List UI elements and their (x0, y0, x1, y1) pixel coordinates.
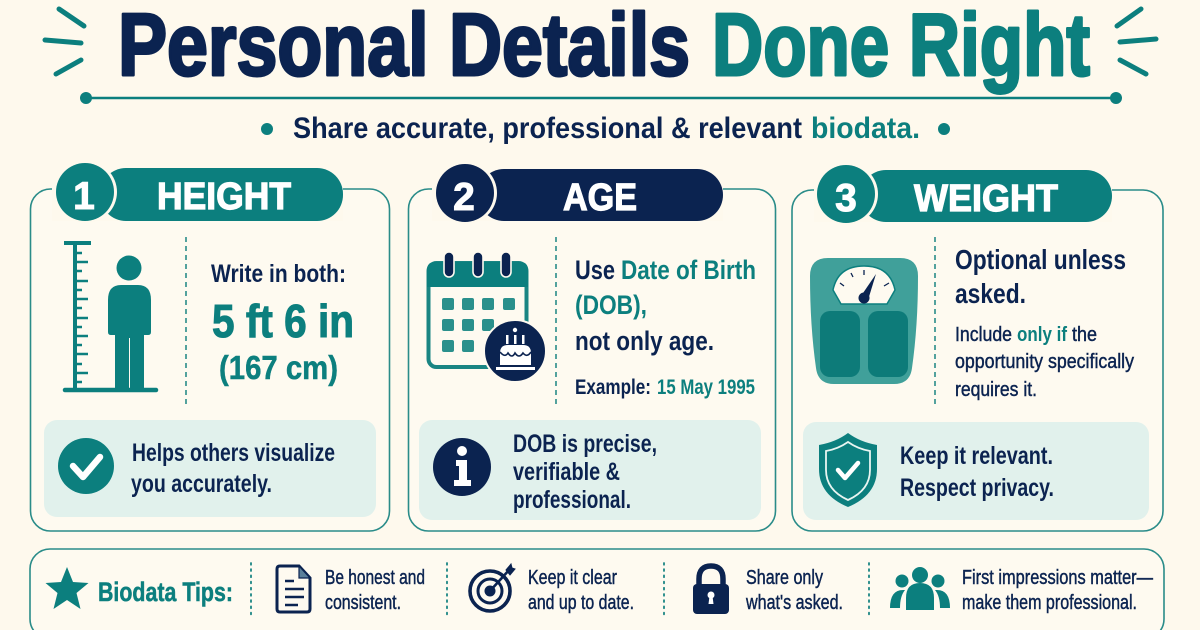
icon: ruler and person (64, 243, 156, 390)
subtitle: biodata. (811, 112, 920, 145)
age guidance text (575, 255, 756, 399)
weight header (814, 163, 1112, 225)
age guidance text: 15 May 1995 (657, 376, 755, 399)
tip: honest (277, 566, 425, 614)
weight callout (803, 422, 1149, 520)
weight header: WEIGHT (914, 178, 1058, 220)
height guidance text: (167 cm) (219, 349, 338, 386)
panel: height (30, 161, 390, 531)
weight guidance text: Optional unless (955, 244, 1126, 275)
icon: check (58, 438, 114, 494)
weight header: 3 (835, 177, 857, 220)
height header: HEIGHT (157, 176, 291, 218)
age callout: verifiable & (513, 458, 620, 486)
age callout: DOB is precise, (513, 430, 657, 458)
weight guidance text: only if (1017, 324, 1067, 346)
tip: first impressions: make them professional. (962, 592, 1137, 614)
icon: lock (693, 566, 729, 614)
tip: clear (470, 564, 634, 614)
height callout: Helps others visualize (132, 439, 335, 467)
left spark accents (45, 9, 84, 74)
icon: calendar with cake (427, 252, 546, 382)
tip: clear: Keep it clear (528, 567, 617, 589)
age header: 2 (453, 176, 475, 219)
age header: AGE (563, 177, 637, 219)
tip: share only: what's asked. (745, 592, 843, 614)
tip: first impressions (890, 567, 1153, 614)
age callout (419, 420, 761, 520)
title underline (80, 92, 1122, 104)
height callout (44, 420, 376, 517)
age callout: professional. (513, 486, 631, 514)
tip: share only (693, 566, 843, 614)
icon: star (46, 567, 88, 609)
weight guidance text: opportunity specifically (955, 351, 1134, 373)
age guidance text: not only age. (575, 326, 714, 356)
weight guidance text: requires it. (955, 379, 1037, 401)
icon: target (470, 564, 515, 611)
height header: 1 (73, 175, 95, 218)
panel: biodata tips (30, 549, 1164, 630)
age guidance text: (DOB), (575, 290, 647, 320)
icon: bathroom scale (810, 258, 918, 384)
panel: age (408, 162, 776, 531)
weight guidance text: asked. (955, 278, 1026, 309)
weight guidance text: the (1072, 324, 1097, 346)
age guidance text: Example: (575, 376, 651, 399)
height callout: you accurately. (131, 470, 272, 498)
icon: people (890, 567, 950, 610)
weight guidance text (955, 244, 1134, 401)
tip: share only: Share only (746, 567, 823, 589)
panel: weight (792, 163, 1163, 531)
right spark accents (1117, 9, 1156, 74)
tips heading: Biodata Tips: (98, 577, 233, 607)
height guidance text: 5 ft 6 in (212, 295, 354, 347)
weight callout: Keep it relevant. (900, 442, 1053, 470)
icon: info (433, 438, 491, 496)
tip: clear: and up to date. (528, 592, 634, 614)
height guidance text: Write in both: (211, 260, 346, 288)
height guidance text (211, 260, 354, 386)
icon: document (277, 566, 310, 612)
tip: first impressions: First impressions matter— (962, 567, 1153, 589)
age guidance text: Use (575, 255, 615, 285)
height header (52, 161, 343, 223)
age guidance text: Date of Birth (621, 255, 756, 285)
subtitle: Share accurate, professional & relevant (293, 112, 802, 145)
weight guidance text: Include (955, 324, 1012, 346)
tip: honest: consistent. (325, 592, 401, 614)
weight callout: Respect privacy. (900, 474, 1054, 502)
age header (432, 162, 723, 224)
icon: shield (819, 433, 877, 507)
tip: honest: Be honest and (325, 567, 425, 589)
